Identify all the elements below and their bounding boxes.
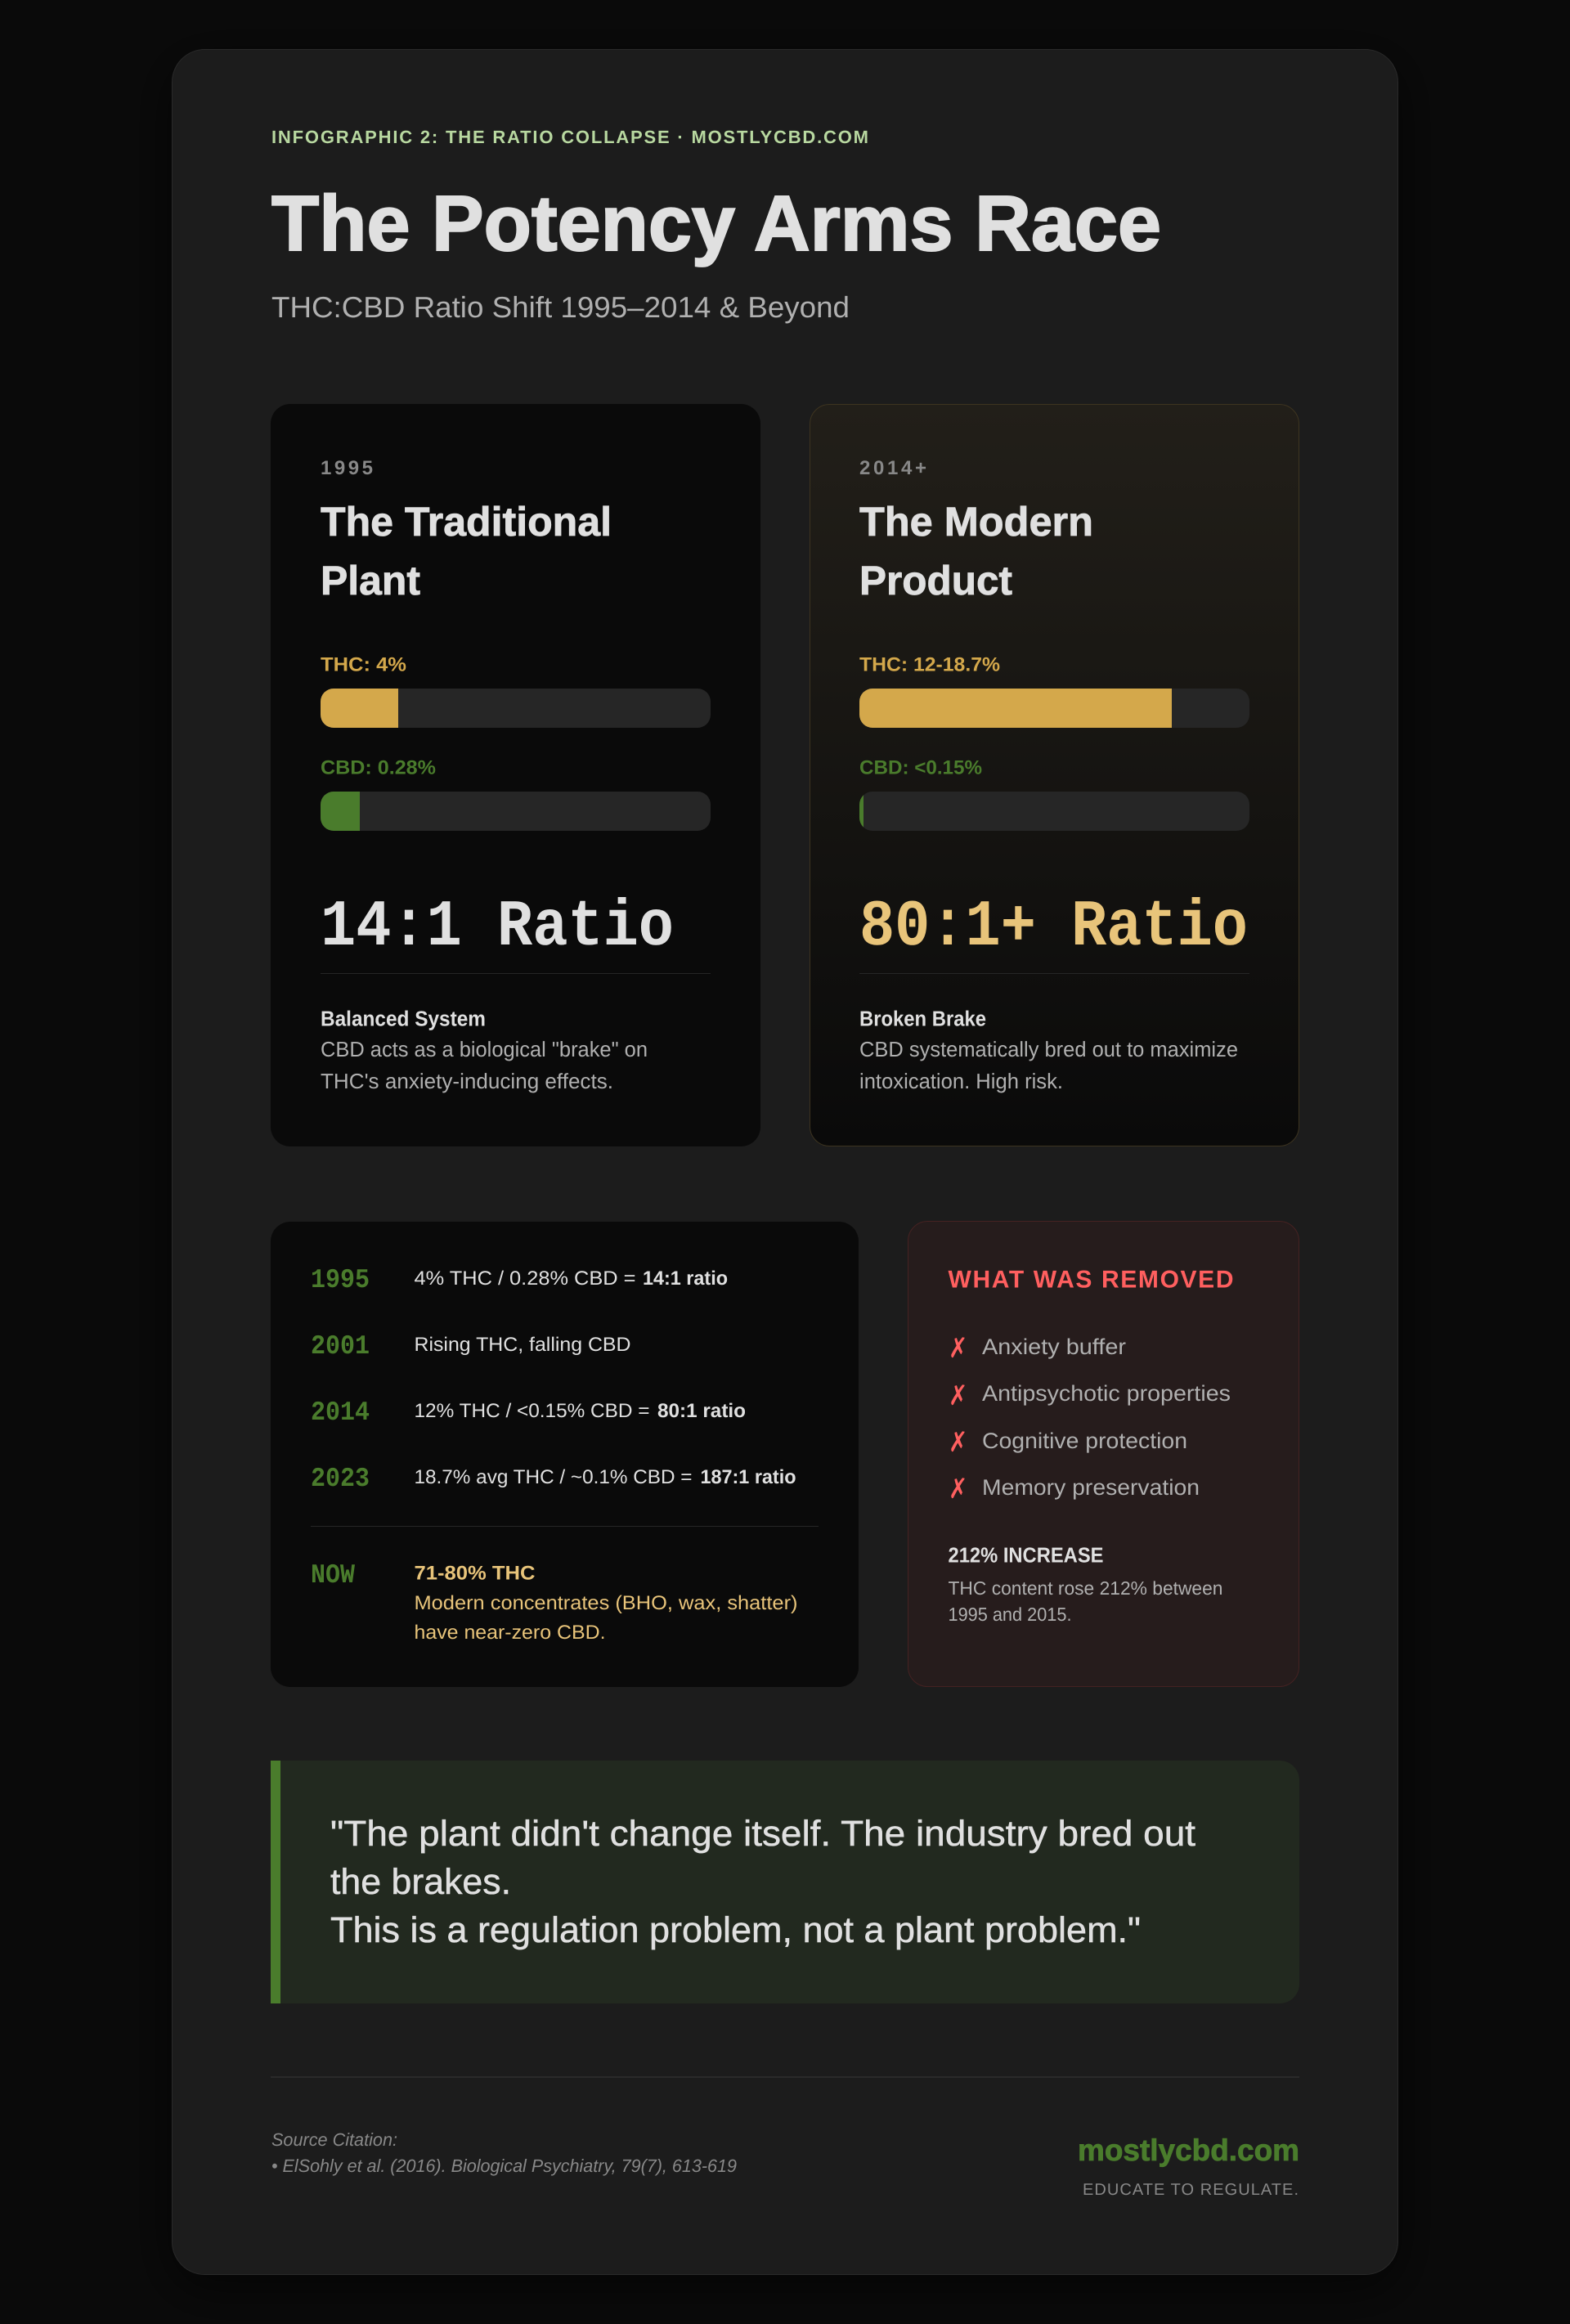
removed list: Anxiety buffer — [982, 1335, 1126, 1359]
subtitle: THC:CBD Ratio Shift 1995–2014 & Beyond — [271, 290, 850, 324]
description: THC's anxiety-inducing effects. — [321, 1069, 613, 1093]
quote text: the brakes. — [330, 1862, 511, 1902]
removed heading: WHAT WAS REMOVED — [949, 1266, 1233, 1294]
THC bar — [321, 654, 711, 728]
eyebrow: INFOGRAPHIC 2: THE RATIO COLLAPSE · MOSTLYCBD.COM — [271, 127, 868, 147]
ratio: 14:1 Ratio — [321, 891, 674, 965]
panel: 1995 traditional plant — [271, 404, 760, 1146]
removed list — [949, 1332, 1231, 1505]
removed list: ✗ — [949, 1426, 967, 1459]
timeline row 2023 — [311, 1464, 796, 1494]
timeline row now: have near-zero CBD. — [414, 1622, 605, 1644]
description — [859, 1006, 1238, 1093]
panel heading: Plant — [321, 558, 420, 603]
CBD bar — [859, 757, 1249, 831]
removed list: ✗ — [949, 1380, 967, 1412]
panel: what was removed — [908, 1222, 1299, 1686]
CBD bar — [321, 757, 711, 831]
increase stat — [949, 1542, 1223, 1625]
brand: EDUCATE TO REGULATE. — [1083, 2181, 1299, 2199]
THC bar: THC: 12-18.7% — [859, 654, 1000, 675]
year label: 2014+ — [859, 457, 926, 479]
timeline row now: 71-80% THC — [414, 1562, 535, 1585]
main card — [172, 49, 1398, 2275]
increase stat: 212% INCREASE — [949, 1542, 1104, 1567]
timeline row now: NOW — [311, 1560, 355, 1590]
timeline row 2014: 80:1 ratio — [657, 1400, 746, 1422]
panel: timeline — [271, 1222, 859, 1687]
timeline row 1995: 4% THC / 0.28% CBD = — [414, 1267, 636, 1290]
timeline row 1995 — [311, 1265, 728, 1295]
timeline row now — [311, 1560, 798, 1644]
quote text — [330, 1814, 1195, 1950]
increase stat: THC content rose 212% between — [949, 1577, 1223, 1599]
timeline row 2014: 2014 — [311, 1398, 370, 1428]
panel heading — [321, 499, 612, 603]
description: CBD systematically bred out to maximize — [859, 1037, 1238, 1061]
removed list: Cognitive protection — [982, 1429, 1187, 1453]
brand: mostlycbd.com — [1078, 2133, 1299, 2167]
source citation: Source Citation: — [271, 2129, 397, 2150]
removed list: ✗ — [949, 1473, 967, 1505]
description: intoxication. High risk. — [859, 1069, 1063, 1093]
timeline row 2014: 12% THC / <0.15% CBD = — [414, 1400, 649, 1422]
ratio: 80:1+ Ratio — [859, 891, 1248, 965]
timeline row 2023: 2023 — [311, 1464, 370, 1494]
panel heading: The Traditional — [321, 499, 612, 545]
description: Balanced System — [321, 1006, 486, 1030]
header — [271, 127, 1161, 324]
title: The Potency Arms Race — [271, 180, 1161, 267]
timeline row 1995: 14:1 ratio — [643, 1267, 728, 1290]
source citation: • ElSohly et al. (2016). Biological Psychiatry, 79(7), 613-619 — [271, 2156, 737, 2176]
description: CBD acts as a biological "brake" on — [321, 1037, 648, 1061]
increase stat: 1995 and 2015. — [949, 1604, 1071, 1625]
removed list: ✗ — [949, 1332, 967, 1365]
description: Broken Brake — [859, 1006, 986, 1030]
quote text: "The plant didn't change itself. The industry bred out — [330, 1814, 1195, 1854]
panel heading: The Modern — [859, 499, 1093, 545]
timeline row 2014 — [311, 1398, 746, 1428]
THC bar — [859, 654, 1249, 728]
timeline row 1995: 1995 — [311, 1265, 370, 1295]
year label: 1995 — [321, 457, 373, 479]
timeline row now: Modern concentrates (BHO, wax, shatter) — [414, 1592, 798, 1614]
source citation — [271, 2129, 737, 2176]
removed list: Antipsychotic properties — [982, 1381, 1231, 1406]
removed list: Memory preservation — [982, 1475, 1200, 1500]
quote text: This is a regulation problem, not a plant problem." — [330, 1910, 1141, 1950]
panel heading: Product — [859, 558, 1012, 603]
panel: 2014+ modern product — [810, 404, 1299, 1146]
timeline row 2023: 18.7% avg THC / ~0.1% CBD = — [414, 1466, 692, 1488]
THC bar: THC: 4% — [321, 654, 406, 675]
panel: quote — [271, 1761, 1299, 2003]
brand — [1078, 2133, 1299, 2199]
timeline row 2001: Rising THC, falling CBD — [414, 1334, 631, 1356]
timeline row 2023: 187:1 ratio — [700, 1466, 796, 1488]
footer — [271, 2129, 1299, 2199]
CBD bar: CBD: <0.15% — [859, 757, 982, 778]
timeline row 2001 — [311, 1331, 631, 1362]
panel heading — [859, 499, 1093, 603]
CBD bar: CBD: 0.28% — [321, 757, 436, 778]
description — [321, 1006, 648, 1093]
timeline row 2001: 2001 — [311, 1331, 370, 1362]
